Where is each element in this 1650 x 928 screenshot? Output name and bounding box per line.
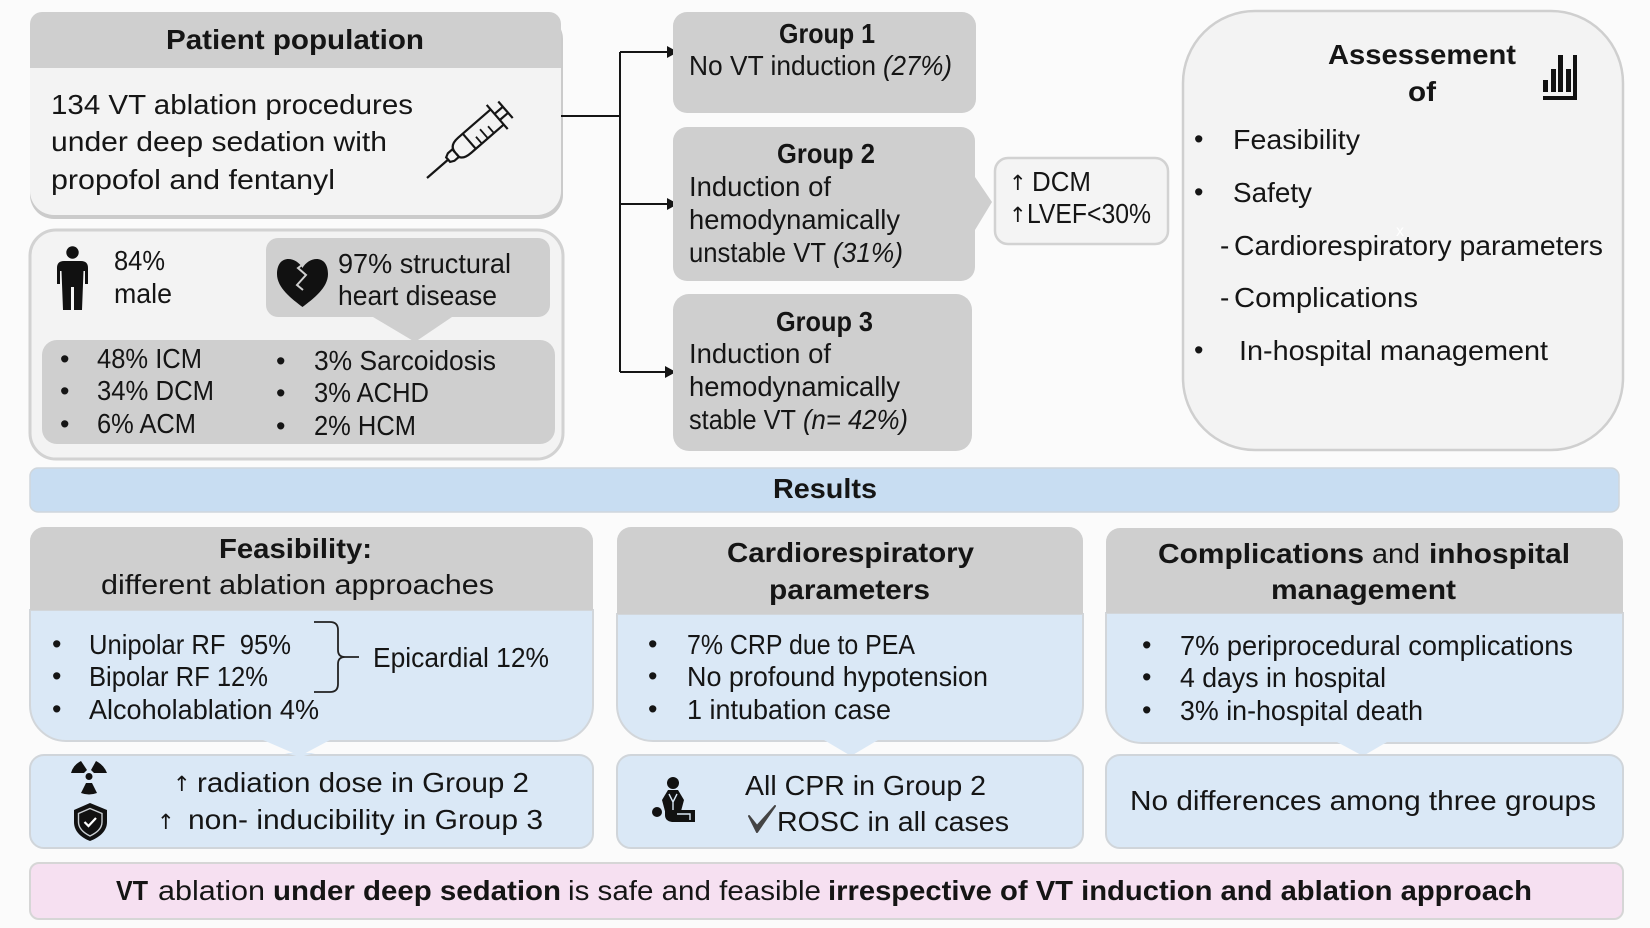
list: ablation approaches: • <box>52 694 61 724</box>
panel: patient population <box>30 12 563 219</box>
panel: group 3: (n= 42%) <box>803 404 908 435</box>
panel: group 2: hemodynamically <box>689 204 900 235</box>
icon: shield <box>74 803 107 841</box>
list: cardiomyopathy aetiologies <box>42 340 555 444</box>
panel: feasibility findings <box>30 753 593 848</box>
panel: group 3: Group 3 <box>776 306 873 337</box>
text: procedures <box>51 89 413 195</box>
panel: cardiorespiratory parameters <box>617 527 1083 756</box>
list: complications findings <box>1142 630 1573 726</box>
callout: structural heart disease <box>266 238 550 342</box>
callout: group 2 characteristics <box>995 158 1168 244</box>
list: ablation approaches <box>52 629 319 725</box>
list: assessment items: In-hospital management <box>1239 335 1548 366</box>
heading: assessment of: of <box>1408 76 1437 107</box>
conclusion bar: under deep sedation <box>273 875 561 906</box>
list: assessment items: - <box>1220 230 1229 261</box>
list: assessment items: • <box>1194 335 1203 365</box>
heading band: feasibility <box>30 527 593 610</box>
text: procedures: under deep sedation with <box>51 126 387 157</box>
list: ablation approaches: • <box>52 629 61 659</box>
panel: group 2 <box>673 127 992 281</box>
heading band: cardiorespiratory: Cardiorespiratory <box>727 537 974 568</box>
text: ROSC: ROSC in all cases <box>777 806 1009 837</box>
heading band: cardiorespiratory <box>617 527 1083 614</box>
bracket: epicardial <box>314 622 359 692</box>
text: procedures: propofol and fentanyl <box>51 164 335 195</box>
list: ablation approaches: Bipolar RF 12% <box>89 661 268 692</box>
icon: CPR <box>652 777 695 822</box>
label: epicardial: Epicardial 12% <box>373 642 549 673</box>
list: assessment items: Complications <box>1234 282 1418 313</box>
list: complications findings: • <box>1142 695 1151 725</box>
heading band: complications: and <box>1372 538 1420 569</box>
list: cardiorespiratory findings: No profound hypotension <box>687 661 988 692</box>
callout: group 2 characteristics: LVEF<30% <box>1027 198 1151 229</box>
panel: group 2: unstable VT <box>689 237 826 268</box>
text: non-inducibility: ↑ <box>157 810 175 834</box>
icon: syringe <box>417 98 516 190</box>
text: procedures: 134 VT ablation procedures <box>51 89 413 120</box>
list: cardiomyopathy aetiologies: 48% ICM <box>97 343 202 374</box>
panel: group 3 <box>673 294 972 451</box>
list: assessment items <box>1194 124 1603 366</box>
heading band: complications <box>1106 528 1623 613</box>
list: cardiomyopathy aetiologies: 34% DCM <box>97 375 214 406</box>
panel: demographics <box>30 230 563 459</box>
heading band: complications: Complications <box>1158 538 1364 569</box>
text: male share: 84% <box>114 245 165 276</box>
callout: group 2 characteristics: ↑ <box>1009 171 1027 195</box>
list: ablation approaches: Alcoholablation 4% <box>89 694 319 725</box>
list: complications findings: 7% periprocedural complications <box>1180 630 1573 661</box>
callout: structural heart disease: 97% structural <box>338 248 511 279</box>
panel: group 3: hemodynamically <box>689 371 900 402</box>
arrows: population to groups <box>561 46 678 378</box>
text: radiation dose: radiation dose in Group 2 <box>197 767 529 798</box>
panel: group 2: Group 2 <box>777 138 875 169</box>
list: assessment items: • <box>1194 124 1203 154</box>
list: cardiomyopathy aetiologies: • <box>60 344 69 374</box>
panel: CPR findings <box>617 755 1083 848</box>
list: ablation approaches: Unipolar RF 95% <box>89 629 291 660</box>
panel: assessment <box>1183 11 1623 450</box>
icon: bar chart <box>1543 55 1577 100</box>
text: male share <box>114 245 172 309</box>
list: cardiorespiratory findings: • <box>648 629 657 659</box>
list: complications findings: • <box>1142 662 1151 692</box>
panel: group 3: Induction of <box>689 338 831 369</box>
heading band: patient population <box>30 12 561 68</box>
panel: group 2: Induction of <box>689 171 831 202</box>
list: cardiomyopathy aetiologies: • <box>276 378 285 408</box>
heading bar: results: Results <box>773 473 877 504</box>
list: cardiomyopathy aetiologies: 3% ACHD <box>314 377 429 408</box>
panel: no differences <box>1106 755 1623 848</box>
conclusion bar: irrespective of VT induction and ablation approach <box>828 875 1532 906</box>
list: cardiorespiratory findings: 7% CRP due to PEA <box>687 629 915 660</box>
list: assessment items: Feasibility <box>1233 124 1360 155</box>
list: assessment items: Cardiorespiratory parameters <box>1234 230 1603 261</box>
list: cardiomyopathy aetiologies: • <box>60 376 69 406</box>
panel: assessment: x <box>1396 223 1404 240</box>
panel: group 2: (31%) <box>833 237 903 268</box>
list: cardiorespiratory findings: • <box>648 661 657 691</box>
panel: complications <box>1106 528 1623 756</box>
list: cardiomyopathy aetiologies: 2% HCM <box>314 410 416 441</box>
conclusion bar <box>30 863 1623 919</box>
list: cardiorespiratory findings: 1 intubation case <box>687 694 891 725</box>
heading: assessment of: Assessement <box>1328 39 1516 70</box>
list: cardiomyopathy aetiologies: • <box>276 411 285 441</box>
list: cardiomyopathy aetiologies: 6% ACM <box>97 408 196 439</box>
list: cardiorespiratory findings <box>648 629 988 725</box>
conclusion bar: is safe and feasible <box>568 875 821 906</box>
heading band: cardiorespiratory: parameters <box>769 574 930 605</box>
list: assessment items: Safety <box>1233 177 1312 208</box>
text: non-inducibility: non- inducibility in Group 3 <box>188 804 543 835</box>
panel: group 1: Group 1 <box>779 18 875 49</box>
callout: group 2 characteristics: DCM <box>1032 166 1091 197</box>
icon: person <box>57 246 88 310</box>
conclusion bar: ablation <box>158 875 265 906</box>
text: radiation dose: ↑ <box>173 772 191 796</box>
text: all CPR: All CPR in Group 2 <box>745 770 986 801</box>
panel: group 1: (27%) <box>883 50 952 81</box>
icon: radiation <box>71 761 107 794</box>
panel: group 3: stable VT <box>689 404 796 435</box>
panel: feasibility <box>30 527 593 756</box>
heading band: feasibility: Feasibility: <box>219 533 372 564</box>
list: ablation approaches: • <box>52 661 61 691</box>
conclusion bar: VT <box>116 875 148 906</box>
text: male share: male <box>114 278 172 309</box>
heading band: patient population: Patient population <box>166 24 424 55</box>
list: cardiomyopathy aetiologies: • <box>276 346 285 376</box>
panel: no differences: No differences among three groups <box>1130 785 1596 816</box>
heading bar: results <box>30 468 1619 512</box>
heading band: complications: inhospital <box>1429 538 1570 569</box>
list: cardiorespiratory findings: • <box>648 694 657 724</box>
panel: group 1 <box>673 12 976 113</box>
list: cardiomyopathy aetiologies: 3% Sarcoidosis <box>314 345 496 376</box>
panel: group 1: No VT induction <box>689 50 876 81</box>
list: assessment items: • <box>1194 177 1203 207</box>
list: assessment items: - <box>1220 282 1229 313</box>
heading: assessment of <box>1328 39 1516 107</box>
list: complications findings: 3% in-hospital death <box>1180 695 1423 726</box>
list: complications findings: • <box>1142 630 1151 660</box>
callout: structural heart disease: heart disease <box>338 280 497 311</box>
list: cardiomyopathy aetiologies: • <box>60 409 69 439</box>
list: complications findings: 4 days in hospital <box>1180 662 1386 693</box>
icon: check mark <box>749 806 775 832</box>
heading band: feasibility: different ablation approaches <box>101 569 494 600</box>
callout: group 2 characteristics: ↑ <box>1009 203 1027 227</box>
icon: broken heart <box>277 259 328 307</box>
heading band: complications: management <box>1271 574 1456 605</box>
